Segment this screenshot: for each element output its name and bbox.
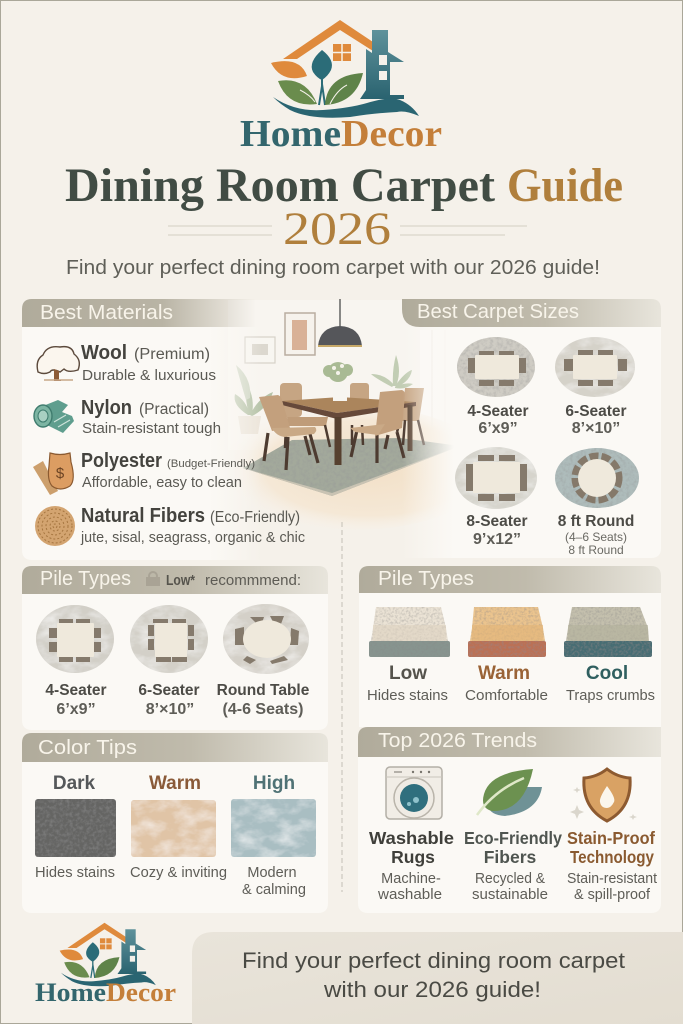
wool text — [81, 342, 216, 384]
carpet: 6-seater square — [130, 605, 208, 718]
icon: nylon roll — [34, 400, 74, 433]
polyester text: Polyester — [81, 450, 162, 472]
panel: best carpet sizes — [402, 299, 661, 558]
trend: eco-friendly fibers: Eco-Friendly — [464, 828, 562, 848]
nylon text: Stain-resistant tough — [82, 420, 221, 437]
pile sample: low: Hides stains — [367, 688, 448, 704]
heading: color tips: Color Tips — [38, 737, 137, 759]
trend: stain-proof technology: Stain-resistant — [567, 871, 657, 887]
trend: washable rugs: Washable — [369, 828, 454, 848]
footer logo: Home — [35, 978, 106, 1007]
carpet: 8-seater: 9’x12” — [473, 531, 521, 548]
carpet: round table: (4-6 Seats) — [223, 701, 303, 718]
heading: top 2026 trends — [358, 727, 661, 757]
carpet: round table — [217, 604, 310, 718]
carpet: 6-seater square: 8’×10” — [146, 701, 194, 718]
carpet: 8 ft round: 8 ft Round — [558, 513, 634, 530]
icon: natural fiber coil — [35, 506, 75, 546]
wool text: Wool — [81, 342, 127, 364]
icon: polyester money bag: $ — [56, 465, 65, 482]
swatch: warm — [130, 773, 227, 881]
carpet: 8 ft round: (4–6 Seats) — [565, 530, 627, 544]
carpet: 6-seater — [555, 337, 635, 437]
swatch: dark: Dark — [53, 773, 96, 794]
swatch: high: High — [253, 773, 295, 794]
pile sample: cool: Cool — [586, 663, 628, 684]
heading: pile types with low recommendation: Low* — [166, 572, 195, 589]
swatch: dark — [35, 773, 116, 881]
divider: dashed vertical line — [341, 522, 343, 892]
swatch: high: & calming — [242, 882, 306, 898]
logo wordmark: Decor — [341, 113, 442, 155]
trend: stain-proof technology: & spill-proof — [574, 887, 651, 903]
carpet: 8-seater: 8-Seater — [466, 513, 528, 530]
carpet: 8 ft round: 8 ft Round — [568, 543, 624, 557]
heading: pile types with low recommendation: Pile Types — [40, 568, 131, 590]
title: Guide — [507, 159, 623, 212]
trend: washable rugs: washable — [377, 887, 442, 903]
heading: best carpet sizes: Best Carpet Sizes — [417, 301, 579, 323]
icon: house — [271, 20, 419, 118]
trend: washable rugs — [369, 828, 454, 903]
polyester text: (Budget-Friendly) — [167, 458, 255, 470]
icon: cotton wool tree — [37, 347, 79, 381]
wool text: (Premium) — [134, 346, 210, 363]
swatch: high: Modern — [247, 865, 297, 881]
nylon text — [81, 397, 221, 437]
title: Dining Room Carpet — [65, 159, 495, 212]
pile sample: warm: Comfortable — [465, 688, 548, 704]
trend: washable rugs: Rugs — [391, 847, 435, 867]
carpet: 6-seater: 6-Seater — [565, 403, 627, 420]
illustration: dining room scene — [220, 299, 490, 530]
footer banner: with our 2026 guide! — [323, 977, 541, 1002]
pile sample: cool — [564, 607, 655, 704]
carpet: round table: Round Table — [217, 682, 310, 699]
heading: color tips — [22, 733, 328, 762]
nylon text: (Practical) — [139, 401, 209, 418]
pile sample: warm — [465, 607, 548, 704]
footer logo: Decor — [106, 978, 176, 1007]
logo: HomeDecor — [240, 20, 442, 155]
heading: best materials — [22, 299, 256, 327]
icon: stain-proof shield — [570, 769, 637, 821]
trend: stain-proof technology: Technology — [570, 847, 654, 867]
carpet: 8 ft round — [555, 448, 639, 557]
pile sample: cool: Traps crumbs — [566, 688, 655, 704]
natural fibers text: (Eco-Friendly) — [210, 509, 300, 526]
heading: best carpet sizes — [402, 299, 661, 327]
panel: best materials — [22, 299, 305, 560]
heading: pile types: Pile Types — [378, 568, 474, 590]
polyester text — [81, 450, 255, 491]
carpet: 4-seater square — [36, 605, 114, 718]
natural fibers text — [80, 505, 305, 546]
polyester text: Affordable, easy to clean — [82, 474, 242, 491]
wool text: Durable & luxurious — [82, 367, 216, 384]
carpet: 6-seater square: 6-Seater — [138, 682, 200, 699]
trend: stain-proof technology — [567, 828, 657, 903]
carpet: 4-seater — [457, 337, 535, 437]
logo wordmark: Home — [240, 113, 341, 155]
logo wordmark — [240, 113, 442, 155]
trend: washable rugs: Machine- — [381, 871, 441, 887]
trend: eco-friendly fibers: Recycled & — [475, 871, 545, 887]
panel: pile types left — [22, 566, 328, 730]
trend: eco-friendly fibers: Fibers — [484, 847, 537, 867]
trend: eco-friendly fibers — [464, 828, 562, 903]
heading: best materials: Best Materials — [40, 302, 173, 324]
subtitle: Find your perfect dining room carpet with our 2026 guide! — [66, 257, 600, 279]
footer banner: Find your perfect dining room carpet — [242, 948, 625, 973]
carpet: 4-seater: 4-Seater — [467, 403, 529, 420]
natural fibers text: Natural Fibers — [81, 505, 205, 527]
nylon text: Nylon — [81, 397, 132, 419]
footer banner — [192, 932, 683, 1024]
year 2026 — [168, 203, 527, 255]
swatch: warm: Warm — [149, 773, 201, 794]
heading: pile types with low recommendation: recommmend: — [205, 573, 301, 589]
pile sample: low: Low — [389, 663, 427, 684]
trend: stain-proof technology: Stain-Proof — [567, 828, 655, 848]
panel: color tips — [22, 733, 328, 913]
swatch: dark: Hides stains — [35, 865, 115, 881]
swatch: high — [231, 773, 316, 898]
carpet: 4-seater square: 4-Seater — [45, 682, 107, 699]
icon: polyester money bag — [33, 453, 73, 495]
carpet: 6-seater: 8’×10” — [572, 420, 620, 437]
heading: pile types — [359, 566, 661, 593]
panel: pile types right — [359, 566, 661, 727]
pile sample: low — [367, 607, 450, 704]
heading: pile types with low recommendation — [22, 566, 328, 594]
year 2026: 2026 — [283, 203, 391, 255]
carpet: 4-seater square: 6’x9” — [56, 701, 96, 718]
footer logo — [35, 923, 176, 1007]
swatch: warm: Cozy & inviting — [130, 865, 227, 881]
carpet: 8-seater — [455, 447, 537, 548]
natural fibers text: jute, sisal, seagrass, organic & chic — [80, 529, 305, 546]
icon: eco leaf — [477, 769, 542, 816]
carpet: 4-seater: 6’x9” — [478, 420, 518, 437]
icon: washing machine — [386, 767, 442, 819]
heading: top 2026 trends: Top 2026 Trends — [378, 730, 537, 752]
trend: eco-friendly fibers: sustainable — [472, 887, 548, 903]
panel: top 2026 trends — [358, 727, 661, 913]
pile sample: warm: Warm — [478, 663, 530, 684]
